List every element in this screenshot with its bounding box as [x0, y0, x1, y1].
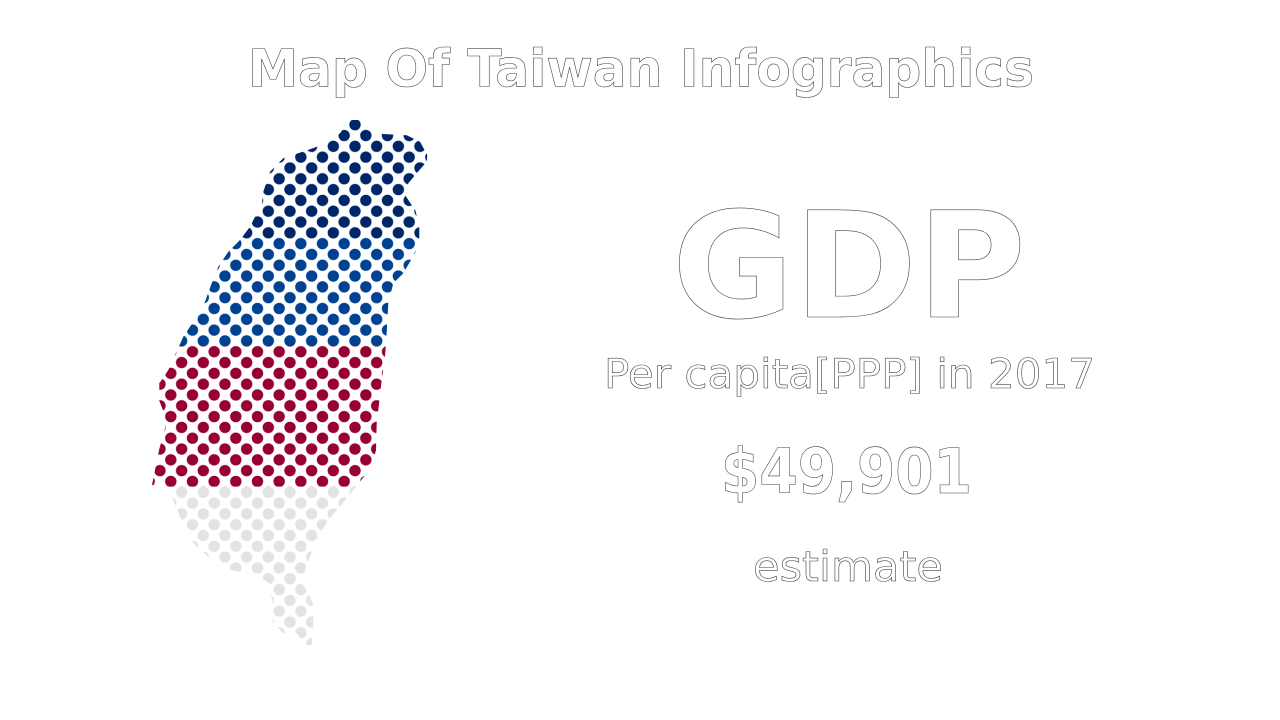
value: GDP per capita: $49,901 [721, 435, 972, 508]
caption: estimate: estimate [753, 542, 943, 591]
heading: GDP: GDP [672, 181, 1026, 352]
map band: red central [152, 346, 386, 487]
map: Taiwan dotted island [152, 120, 428, 645]
title: Map Of Taiwan Infographics [248, 40, 1034, 100]
map band: navy north [242, 120, 428, 238]
subheading: per capita: Per capita[PPP] in 2017 [604, 350, 1095, 398]
map band: blue north-central [179, 238, 420, 346]
map band: grey south [168, 486, 356, 645]
